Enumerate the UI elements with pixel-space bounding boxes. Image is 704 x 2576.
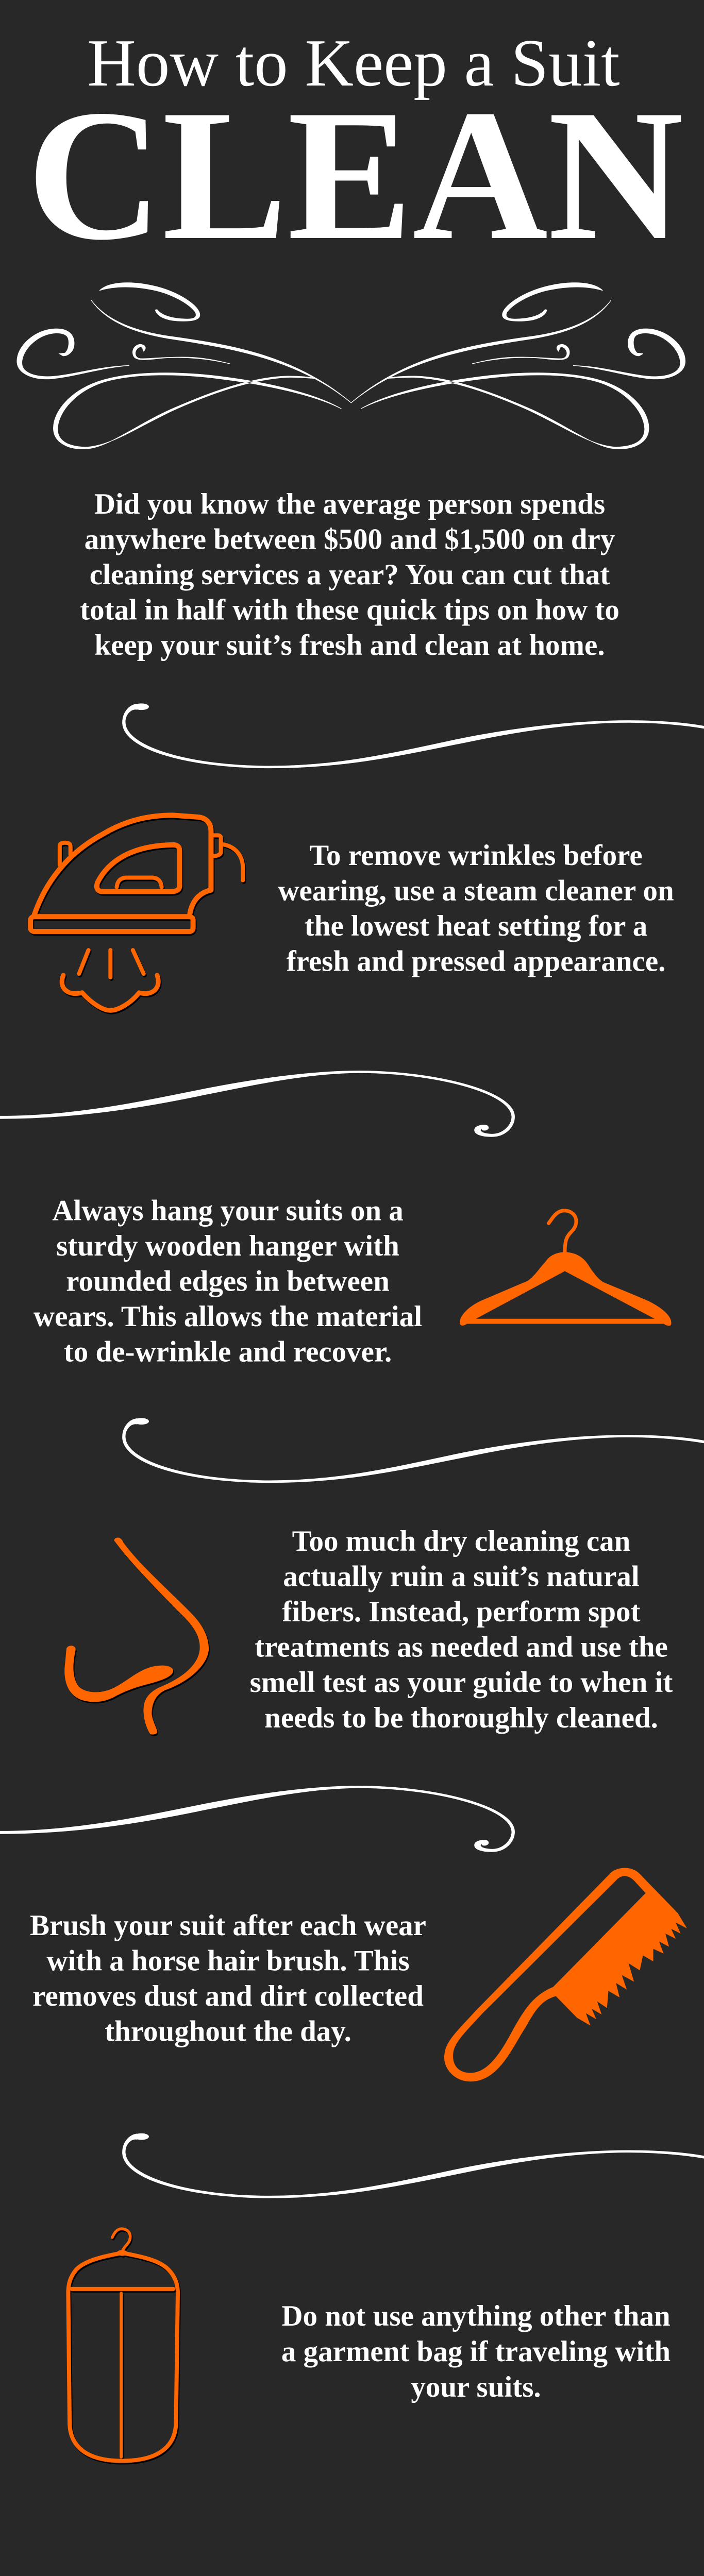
tip 4 text: Brush your suit after each wear [30, 1909, 426, 1942]
tip 3 text: needs to be thoroughly cleaned. [264, 1702, 658, 1734]
tip 5 text: Do not use anything other than [281, 2300, 671, 2332]
tip 2 text: Always hang your suits on a [52, 1194, 404, 1227]
tip 2 text: wears. This allows the material [33, 1300, 422, 1333]
tip 2 text: rounded edges in between [66, 1265, 390, 1297]
tip 5 text: a garment bag if traveling with [281, 2335, 671, 2368]
tip 4 text: with a horse hair brush. This [46, 1944, 410, 1977]
intro text: cleaning services a year? You can cut that [90, 558, 610, 591]
tip 5 text: your suits. [411, 2371, 541, 2403]
icon: wooden hanger [460, 1211, 672, 1326]
tip 3 text: fibers. Instead, perform spot [282, 1596, 641, 1628]
tip 3 text [250, 1525, 673, 1734]
tip 1 text [278, 839, 674, 978]
swash divider 5 [123, 2133, 704, 2198]
tip 3 text: Too much dry cleaning can [292, 1525, 630, 1557]
tip 2 text: to de-wrinkle and recover. [64, 1335, 392, 1368]
swash divider 2 [0, 1071, 514, 1137]
tip 4 text: throughout the day. [105, 2015, 351, 2047]
tip 1 text: To remove wrinkles before [309, 839, 643, 872]
intro text: Did you know the average person spends [94, 488, 605, 520]
icon: garment bag [68, 2229, 179, 2463]
ornament: header flourish [17, 283, 685, 449]
tip 1 text: wearing, use a steam cleaner on [278, 875, 674, 907]
icon: steam iron [30, 815, 244, 1012]
tip 4 text: removes dust and dirt collected [32, 1980, 424, 2012]
title: How to Keep a Suit [87, 26, 620, 100]
tip 2 text [33, 1194, 422, 1368]
tip 3 text: actually ruin a suit’s natural [283, 1560, 640, 1593]
tip 2 text: sturdy wooden hanger with [56, 1230, 399, 1262]
icon: horse hair brush [444, 1868, 687, 2081]
intro text: keep your suit’s fresh and clean at home. [94, 629, 605, 662]
tip 4 text [30, 1909, 426, 2047]
tip 3 text: treatments as needed and use the [255, 1631, 668, 1663]
tip 1 text: fresh and pressed appearance. [287, 945, 665, 978]
swash divider 4 [0, 1786, 514, 1852]
title: CLEAN [27, 71, 683, 279]
tip 5 text [281, 2300, 671, 2403]
intro text [80, 488, 619, 662]
swash divider 3 [123, 1418, 704, 1483]
swash divider 1 [123, 704, 704, 768]
tip 1 text: the lowest heat setting for a [305, 910, 647, 942]
intro text: total in half with these quick tips on how to [80, 594, 619, 626]
intro text: anywhere between $500 and $1,500 on dry [85, 523, 615, 555]
tip 3 text: smell test as your guide to when it [250, 1666, 673, 1699]
icon: nose [64, 1537, 210, 1736]
